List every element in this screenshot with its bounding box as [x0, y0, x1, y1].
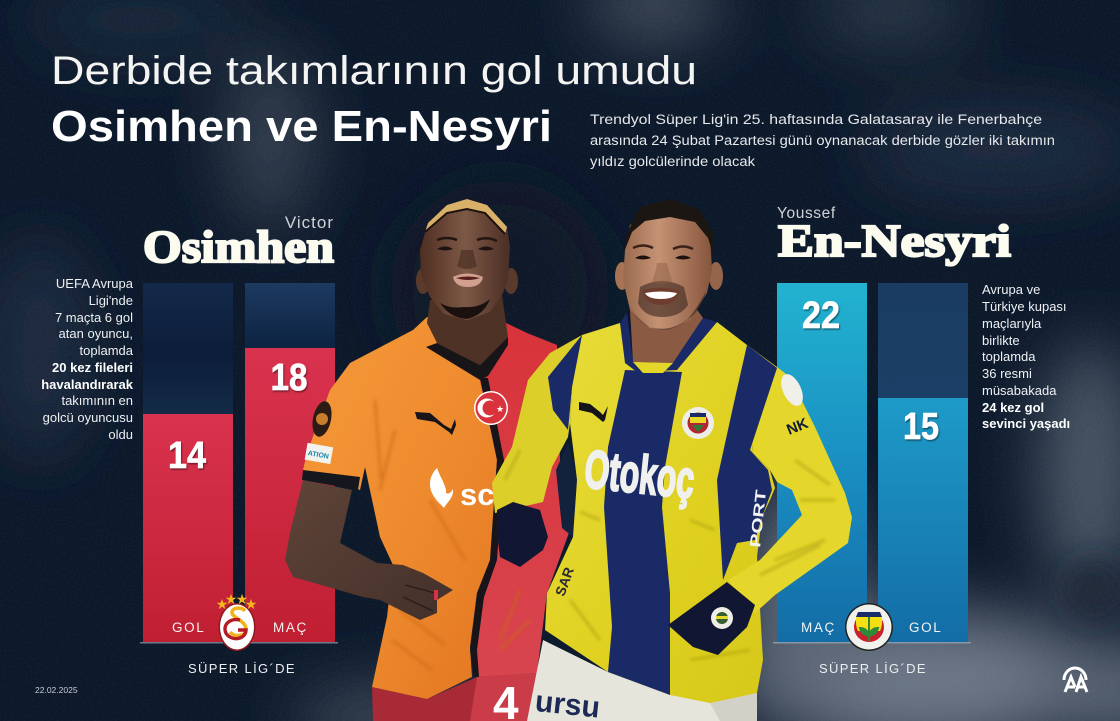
icon: Galatasaray crest: ★: [236, 591, 248, 607]
nose: [652, 263, 672, 284]
eyes: [635, 256, 691, 260]
sleeve sponsor: NK: [784, 415, 811, 439]
text block: Osimhen: golcü oyuncusu: [43, 410, 133, 425]
ears: [615, 262, 629, 290]
dark side gap: [556, 443, 577, 537]
text block: En-Nesyri: maçlarıyla: [982, 316, 1042, 331]
caption: Süper Lig Osimhen: SÜPER LİG´DE: [188, 661, 296, 676]
sleeve text: PORT: [747, 489, 770, 548]
icon: Fenerbahçe crest: [845, 603, 893, 651]
icon: Galatasaray crest: ★: [245, 596, 257, 612]
hair: [624, 199, 714, 257]
ears: [416, 268, 430, 294]
text block: Osimhen: UEFA Avrupa: [56, 276, 134, 291]
player: Victor Osimhen: [285, 199, 570, 721]
heading: Victor Osimhen: Osimhen: [143, 221, 334, 272]
left glove: [497, 502, 548, 567]
hair: [425, 199, 507, 234]
cuff: [302, 470, 360, 490]
sponsor: Otokoç: Otokoç: [582, 439, 697, 510]
arm and hand: [285, 480, 453, 620]
bar: gol 14: [143, 414, 233, 643]
shirt torso: [545, 322, 775, 703]
text block: Osimhen: oldu: [108, 427, 133, 442]
right stripe: [717, 345, 777, 580]
player: Victor Osimhen: ★: [496, 405, 504, 415]
eyes: [437, 246, 494, 250]
brows: [633, 246, 693, 249]
text block: Osimhen: Ligi'nde: [89, 293, 133, 308]
hairline: [425, 209, 505, 234]
puma logo: [579, 402, 608, 422]
text block: En-Nesyri: sevinci yaşadı: [982, 416, 1070, 431]
beard shading: [628, 281, 706, 330]
heading: Youssef En-Nesyri: En-Nesyri: [778, 215, 1011, 266]
shirt: red half: [470, 320, 570, 677]
text block: Osimhen: takımının en: [61, 393, 133, 408]
description text: [590, 112, 1055, 169]
head: [420, 207, 510, 320]
heading: Victor Osimhen: Victor: [285, 213, 334, 232]
text block: En-Nesyri: toplamda: [982, 349, 1036, 364]
mouth: [453, 274, 483, 287]
heading: Youssef En-Nesyri: Youssef: [777, 205, 836, 222]
value 14: 14: [168, 435, 206, 477]
puma logo: [415, 412, 456, 435]
label gol: GOL: [909, 620, 942, 635]
nose: [457, 250, 477, 269]
club crest: [682, 407, 714, 439]
glove badge: [711, 607, 733, 629]
collar: [426, 337, 508, 380]
description text: arasında 24 Şubat Pazartesi günü oynanacak derbide gözler iki takımın: [590, 133, 1055, 148]
bar chart: Osimhen: [140, 283, 338, 644]
shirt: orange half: [303, 317, 500, 699]
beard: [440, 299, 490, 319]
centre stripe: [604, 370, 682, 695]
icon: Galatasaray crest: [216, 591, 257, 651]
league sleeve badge: [777, 371, 807, 409]
icon: Galatasaray crest: ★: [216, 596, 228, 612]
head: [623, 210, 712, 330]
bar chart: En-Nesyri: [773, 283, 971, 644]
collar: [620, 313, 717, 372]
icon: Turkish flag badge: [474, 391, 508, 425]
sleeve folds: [505, 450, 835, 660]
player: Victor Osimhen: ATION: [307, 450, 329, 461]
text block: En-Nesyri: 36 resmi: [982, 366, 1032, 381]
side print: SAR: [552, 565, 577, 598]
shorts: [527, 640, 757, 721]
text block: En-Nesyri: birlikte: [982, 333, 1020, 348]
description text: Trendyol Süper Lig'in 25. haftasında Galatasaray ile Fenerbahçe: [590, 112, 1042, 127]
text block: En-Nesyri: müsabakada: [982, 383, 1057, 398]
sleeve patch: [305, 443, 333, 464]
label gol: GOL: [172, 620, 205, 635]
league patch: [309, 400, 335, 438]
mouth and smile: [642, 288, 680, 305]
date: 22.02.2025: [35, 685, 78, 695]
value 15: 15: [903, 406, 939, 448]
left stripe: [548, 335, 582, 430]
value 18: 18: [270, 357, 308, 399]
title: Osimhen ve En-Nesyri: [51, 102, 552, 151]
neck: [427, 295, 508, 365]
icon: AA agency logo: [1064, 668, 1087, 692]
centre stripe: [470, 378, 504, 677]
sponsor logo: [430, 468, 453, 508]
text block: Osimhen: [41, 276, 134, 442]
label maç: MAÇ: [801, 620, 836, 635]
text block: En-Nesyri: Avrupa ve: [982, 282, 1040, 297]
right glove: [668, 582, 755, 655]
text block: En-Nesyri: Türkiye kupası: [982, 299, 1067, 314]
player: Youssef En-Nesyri: [492, 199, 852, 721]
brows: [437, 238, 497, 241]
bar: maç 18: [245, 348, 335, 643]
text block: En-Nesyri: [982, 282, 1070, 431]
icon: Galatasaray crest: ★: [225, 591, 237, 607]
player: Victor Osimhen: sc: [460, 477, 494, 512]
bar: gol 15: [878, 398, 968, 643]
bar: maç 22: [777, 283, 867, 643]
text block: Osimhen: toplamda: [80, 343, 134, 358]
label maç: MAÇ: [273, 620, 308, 635]
caption: Süper Lig En-Nesyri: SÜPER LİG´DE: [819, 661, 927, 676]
description text: yıldız golcülerinde olacak: [590, 154, 755, 169]
neck: [630, 300, 703, 363]
title: Derbide takımlarının gol umudu: [51, 49, 697, 93]
right sleeve: [728, 345, 852, 613]
text block: Osimhen: 20 kez fileleri: [52, 360, 133, 375]
text block: Osimhen: 7 maçta 6 gol: [55, 310, 133, 325]
text block: Osimhen: havalandırarak: [41, 377, 134, 392]
text block: En-Nesyri: 24 kez gol: [982, 400, 1044, 415]
shorts: [372, 673, 537, 721]
finger lines: [403, 585, 435, 611]
title: [51, 49, 697, 151]
ring on finger: [434, 590, 438, 600]
shirt folds: [375, 400, 530, 670]
value 22: 22: [802, 295, 840, 337]
text block: Osimhen: atan oyuncu,: [59, 326, 133, 341]
left sleeve: [492, 335, 582, 513]
